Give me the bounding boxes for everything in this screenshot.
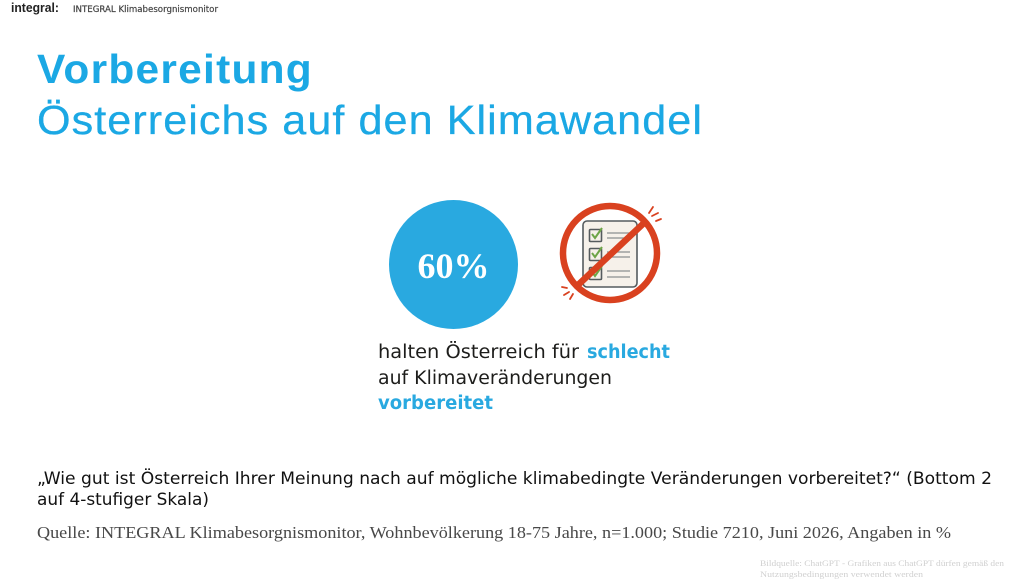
source note: Quelle: INTEGRAL Klimabesorgnismonitor, Wohnbevölkerung 18-75 Jahre, n=1.000; Studie 7210, Juni 2026, Angaben in % [37,523,951,542]
icon: crossed-out checklist [562,206,661,300]
sparks [562,207,661,299]
logo: integral: [11,0,59,15]
survey question: „Wie gut ist Österreich Ihrer Meinung nach auf mögliche klimabedingte Veränderungen vorbereitet?“ (Bottom 2 [37,469,992,488]
line 2: auf Klimaveränderungen [378,368,612,389]
image credit: Nutzungsbedingungen verwendet werden [760,569,924,579]
image credit [760,558,1005,579]
statistic circle: 60% [389,200,518,329]
image credit: Bildquelle: ChatGPT - Grafiken aus ChatGPT dürfen gemäß den [760,558,1005,568]
monitor name: INTEGRAL Klimabesorgnismonitor [73,5,219,15]
prohibition sign [563,206,657,300]
checkboxes [590,230,602,280]
statement text [378,341,670,414]
line 1: halten Österreich für [378,341,579,363]
checklist sheet [583,221,637,287]
text lines [607,233,630,277]
title [37,46,703,143]
title line 2: Österreichs auf den Klimawandel [37,97,703,143]
line 1 [378,341,670,363]
survey question: auf 4-stufiger Skala) [37,490,209,509]
line 1: schlecht [587,342,670,363]
statistic circle: 60%: 60% [418,246,490,286]
line 3: vorbereitet [378,393,493,414]
title line 1: Vorbereitung [37,46,313,92]
survey question [37,469,992,509]
header: logo and monitor name [11,0,219,15]
check marks [592,228,602,276]
